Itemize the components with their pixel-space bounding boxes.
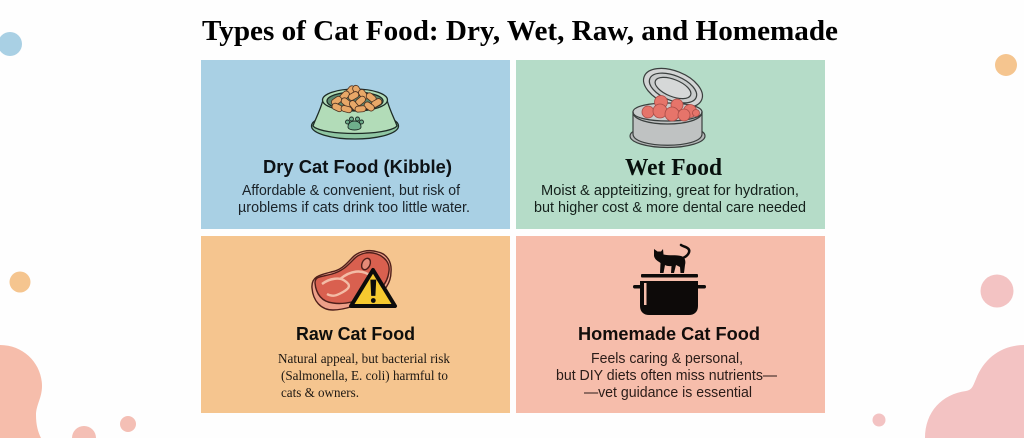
text: dry cat food description: µroblems if cats drink too little water.: [238, 200, 470, 216]
text: raw cat food description: [278, 352, 450, 401]
text: raw cat food description: (Salmonella, E. coli) harmful to: [281, 369, 448, 384]
heading: homemade cat food: Homemade Cat Food: [578, 323, 760, 344]
icon: warning triangle: [351, 270, 395, 306]
icon: raw steak: [312, 251, 395, 310]
heading: wet food: Wet Food: [625, 155, 723, 181]
title: Types of Cat Food: Dry, Wet, Raw, and Homemade: [202, 16, 838, 47]
text: dry cat food description: [238, 183, 470, 216]
text: wet food description: [534, 183, 806, 216]
text: homemade cat food description: —vet guidance is essential: [584, 385, 752, 401]
icon: lid: [638, 61, 708, 115]
panel: homemade cat food: [516, 236, 825, 413]
panel: raw cat food: [201, 236, 510, 413]
panel: dry cat food: [201, 60, 510, 229]
text: raw cat food description: Natural appeal, but bacterial risk: [278, 352, 450, 367]
panel: wet food: [516, 60, 825, 229]
heading: raw cat food: Raw Cat Food: [296, 324, 415, 344]
icon: food bowl with kibble: [312, 84, 398, 139]
icon: open tin can: [630, 61, 708, 148]
text: dry cat food description: Affordable & convenient, but risk of: [242, 183, 461, 199]
text: homemade cat food description: Feels caring & personal,: [591, 351, 743, 367]
text: homemade cat food description: [556, 351, 777, 401]
icon: paw mark: [346, 117, 364, 130]
heading: dry cat food: Dry Cat Food (Kibble): [263, 157, 452, 177]
icon: meat chunks: [642, 96, 700, 121]
text: wet food description: but higher cost & more dental care needed: [534, 200, 806, 216]
text: homemade cat food description: but DIY diets often miss nutrients—: [556, 368, 777, 384]
text: raw cat food description: cats & owners.: [281, 386, 359, 401]
icon: cooking pot: [633, 274, 706, 315]
text: wet food description: Moist & appteitizing, great for hydration,: [541, 183, 799, 199]
icon: cat silhouette: [654, 245, 689, 273]
